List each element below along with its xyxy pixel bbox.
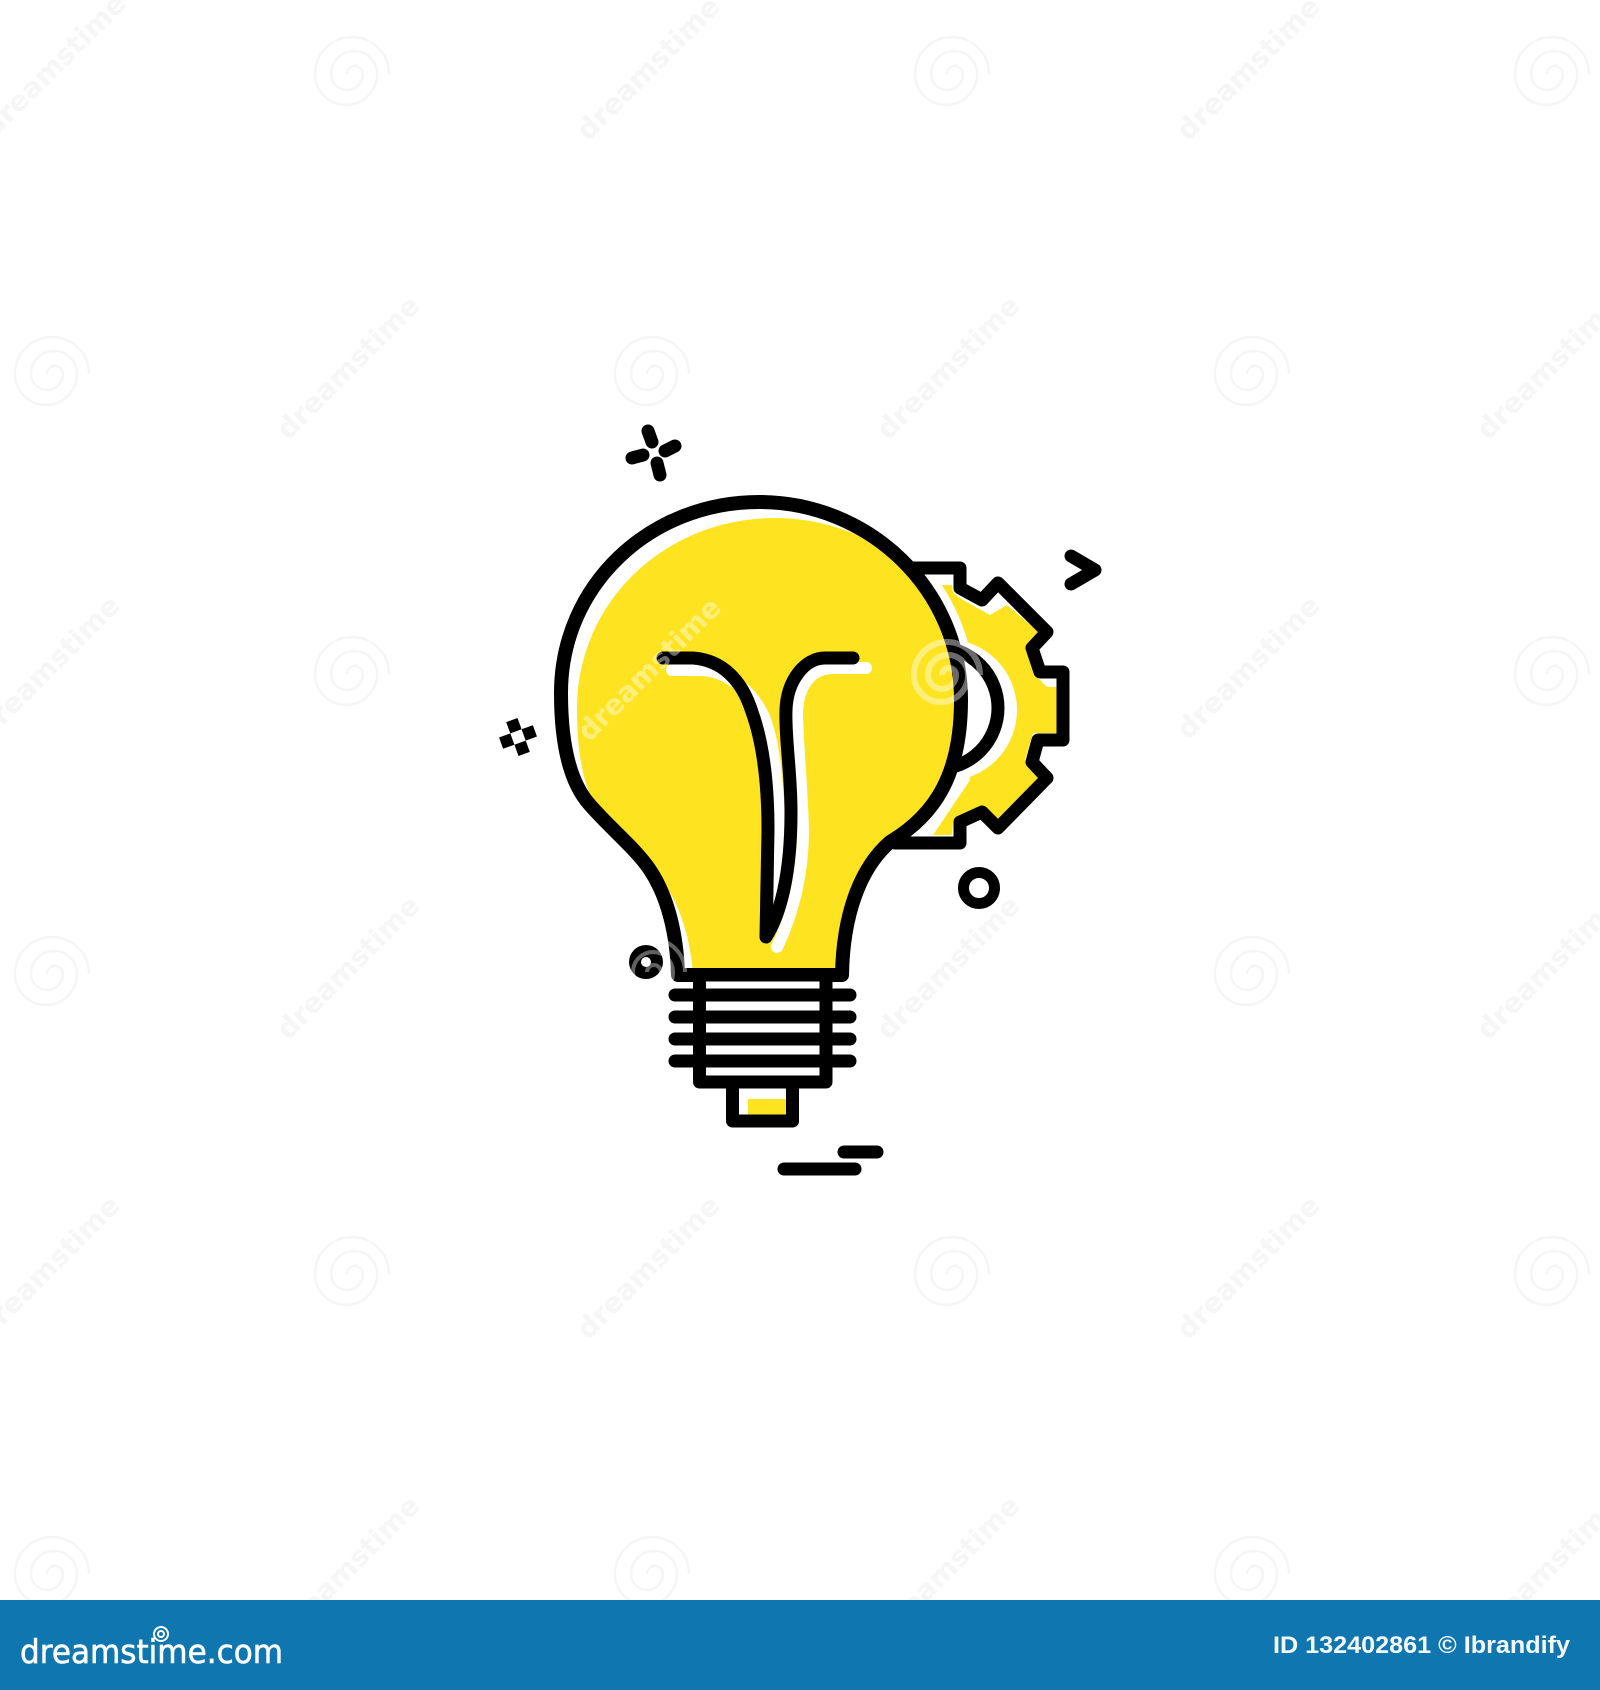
watermark pattern: dreamstime (570, 1189, 727, 1346)
watermark pattern: dreamstime (270, 289, 427, 446)
icon: filament (663, 658, 853, 937)
base frame (700, 975, 826, 1082)
base threads (675, 995, 850, 1061)
brand logotype: dreamstime.com (20, 1632, 283, 1671)
watermark pattern: dreamstime (1170, 1189, 1327, 1346)
icon: gear behind the bulb (561, 502, 1063, 975)
image id and credit: ID 132402861 © Ibrandify (1273, 1632, 1571, 1659)
watermark pattern: dreamstime (870, 889, 1027, 1046)
base tip outline (732, 1082, 792, 1121)
watermark pattern: dreamstime (270, 1489, 427, 1646)
base tip fill (748, 1099, 786, 1115)
icon: chevron (1071, 556, 1095, 584)
icon: four-point sparkle (632, 431, 675, 475)
brand spiral mark (154, 1627, 168, 1641)
icon: ring left (629, 945, 663, 979)
icon: light bulb glass (561, 502, 977, 991)
footer banner (0, 1600, 1600, 1690)
watermark pattern: dreamstime (870, 1489, 1027, 1646)
base collar (678, 968, 842, 982)
watermark pattern: dreamstime (270, 889, 427, 1046)
watermark pattern: dreamstime (870, 289, 1027, 446)
icon: filament highlight (672, 668, 866, 947)
watermark pattern: dreamstime (1170, 589, 1327, 746)
icon: motion dash long (784, 1162, 855, 1176)
icon: screw base (675, 975, 850, 1121)
icon: ring right (964, 872, 994, 904)
icon: checker sparkle (495, 714, 541, 760)
icon: motion dash short (844, 1146, 877, 1158)
watermark pattern: dreamstime (571, 591, 728, 748)
